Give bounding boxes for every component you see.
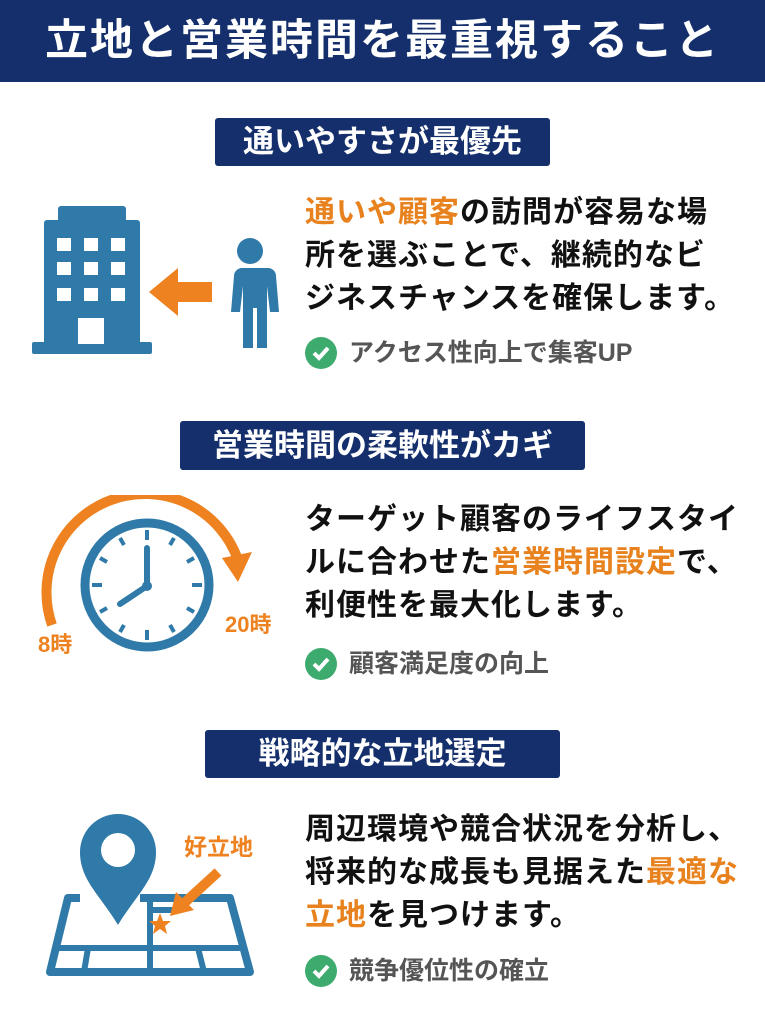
text block 3: 周辺環境や競合状況を分析し、 [305,813,739,846]
heading 1 [215,118,550,166]
heading 3 [205,730,560,778]
text block 3: 立地を見つけます。 [305,899,581,932]
icon: clock [38,495,271,657]
check 1: アクセス性向上で集客UP [349,339,632,367]
heading 2: 営業時間の柔軟性がカギ [212,428,553,463]
text block 3 [305,813,739,932]
title [0,0,765,82]
text block 3: 将来的な成長も見据えた最適な [305,856,739,889]
icon: map pin: 好立地 [184,834,253,860]
heading 3: 戦略的な立地選定 [258,736,506,771]
text block 2 [305,503,739,622]
text block 1 [305,196,735,315]
check 2: 顧客満足度の向上 [349,650,549,678]
text block 1: 通いや顧客の訪問が容易な場 [305,196,708,229]
heading 1: 通いやすさが最優先 [243,124,522,159]
icon: building with person [32,206,279,354]
text block 2: ターゲット顧客のライフスタイ [305,503,739,536]
icon: map pin [46,814,254,976]
text block 2: 利便性を最大化します。 [305,589,643,622]
text block 1: 所を選ぶことで、継続的なビ [305,239,706,272]
check 3: 競争優位性の確立 [349,957,549,985]
icon: clock: 20時 [225,612,271,637]
icon: clock: 8時 [38,632,72,657]
text block 2: ルに合わせた営業時間設定で、 [305,546,738,579]
heading 2 [180,421,585,470]
text block 1: ジネスチャンスを確保します。 [305,282,735,315]
title: 立地と営業時間を最重視すること [45,17,720,65]
